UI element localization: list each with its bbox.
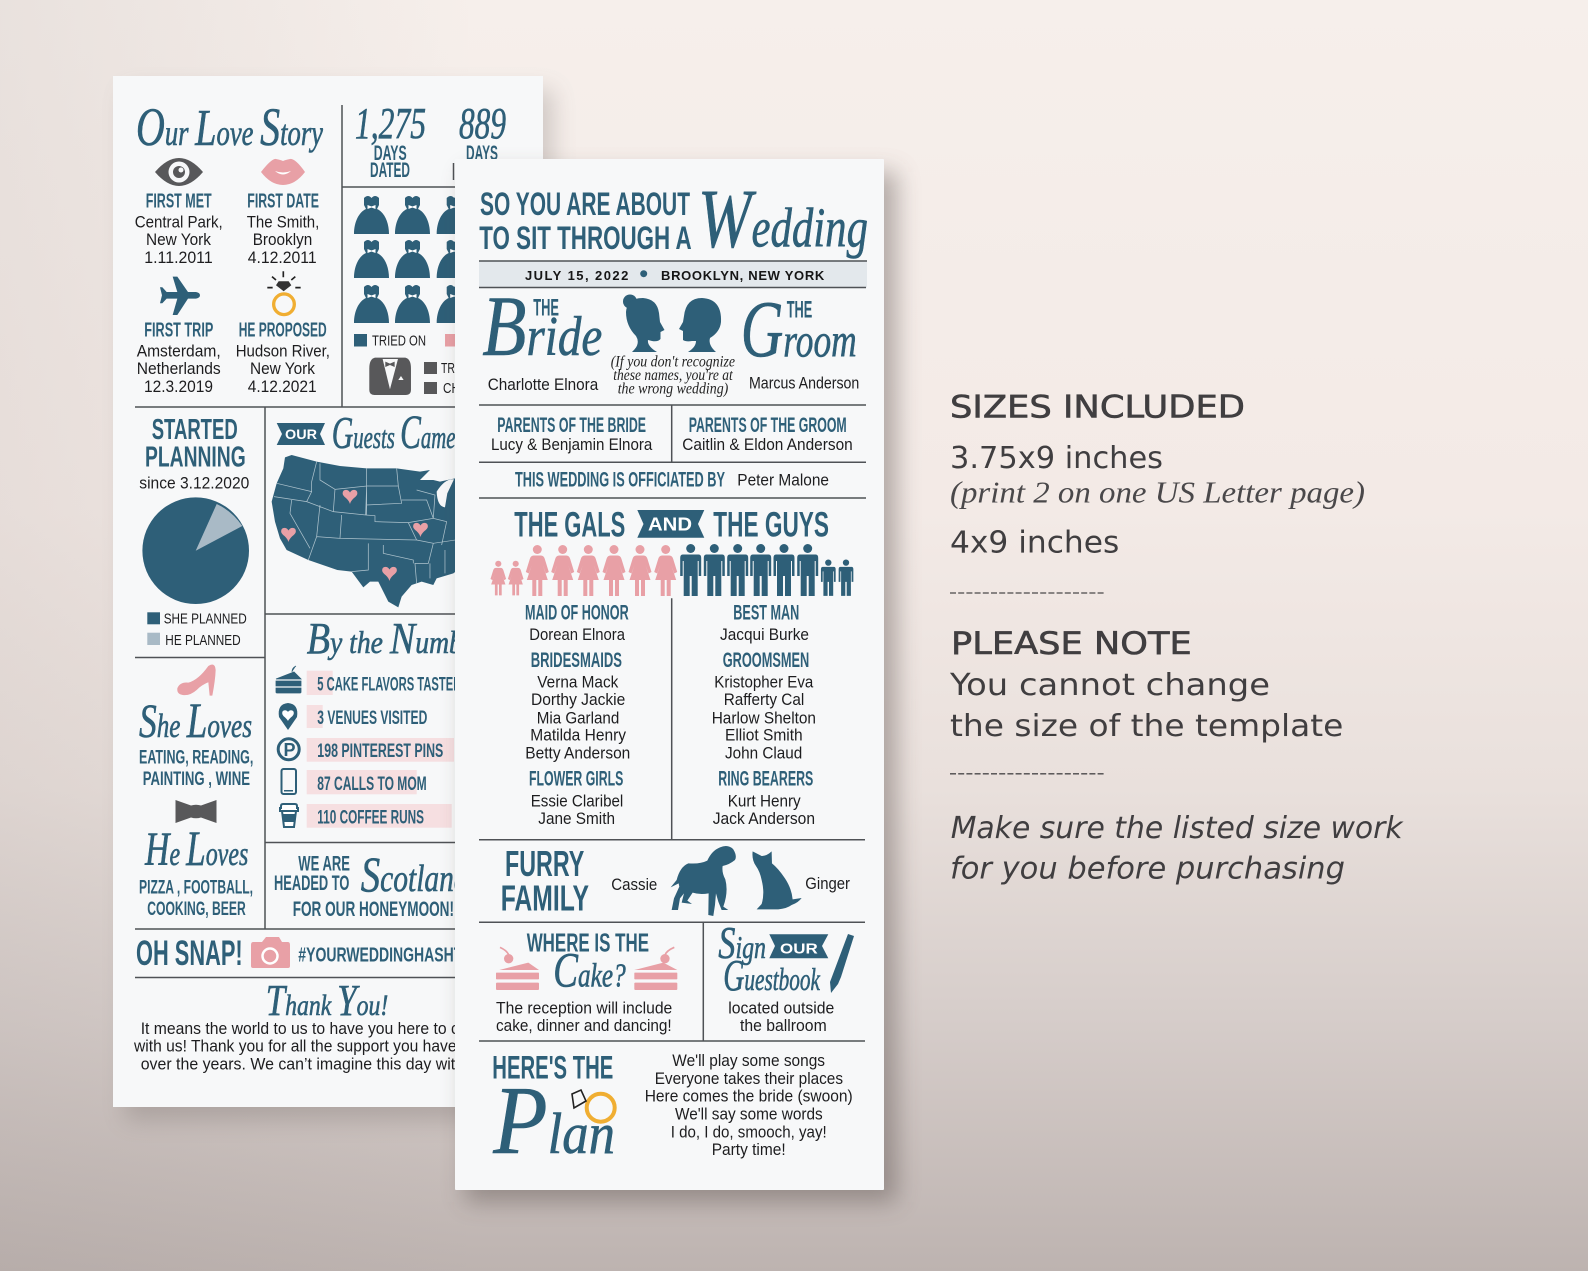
block: thank you: with us! Thank you for all the support you have given us — [133, 1038, 519, 1056]
list: the gals: Betty Anderson — [525, 743, 630, 762]
list: the guys — [712, 601, 816, 828]
title: so you are about to sit through a wedding — [479, 173, 868, 266]
date and location band: BROOKLYN, NEW YORK — [661, 268, 825, 283]
block: oh snap hashtag: #YOURWEDDINGHASHTAG — [298, 945, 482, 967]
block: she loves: She Loves — [139, 692, 252, 748]
block: oh snap hashtag — [136, 934, 482, 973]
heading: the gals and the guys: THE GUYS — [713, 506, 829, 545]
block: he proposed: Hudson River, — [236, 342, 330, 361]
block: started planning — [139, 414, 249, 493]
block: furry family — [501, 843, 850, 919]
list: the guys: Elliot Smith — [725, 726, 803, 745]
block: where is the cake: The reception will include — [496, 998, 672, 1017]
panel: size notes — [949, 389, 1404, 887]
text: ceremony plan: Here comes the bride (swoon) — [645, 1087, 853, 1106]
heading: the gals and the guys — [514, 506, 829, 545]
block: furry family: FAMILY — [501, 878, 589, 919]
legend: dresses — [354, 333, 458, 350]
block: furry family: Ginger — [805, 874, 850, 893]
icon: cat — [752, 851, 802, 909]
text: template size note — [949, 668, 1343, 744]
text: purchase note — [950, 811, 1404, 887]
list: the gals: Matilda Henry — [530, 726, 626, 745]
block: thank you — [133, 976, 521, 1073]
stat: days dated — [355, 99, 426, 182]
block: he proposed: HE PROPOSED — [239, 320, 327, 342]
block: sign our guestbook: Sign — [718, 917, 766, 968]
panel: front program card — [455, 159, 897, 1202]
text: print note: (print 2 on one US Letter page) — [950, 474, 1365, 510]
legend: tuxedos: TRIED ON — [441, 360, 491, 377]
note: wrong wedding: these names, you're at — [613, 367, 733, 384]
block: she loves — [139, 692, 253, 790]
block: thank you: It means the world to us to have you here to celebrate — [141, 1020, 516, 1038]
list: the gals: Dorthy Jackie — [531, 690, 625, 709]
heading: sizes included: SIZES INCLUDED — [950, 389, 1245, 425]
block: first met: Central Park, — [135, 213, 223, 232]
block: sign our guestbook: OUR — [780, 940, 818, 957]
block: honeymoon: Scotland — [361, 846, 469, 902]
list: the guys: Kurt Henry — [728, 791, 801, 810]
stat: days engaged: 889 — [459, 99, 506, 148]
block: first trip: 12.3.2019 — [144, 377, 213, 396]
block: honeymoon: WE ARE — [298, 853, 350, 876]
icon: plane — [160, 277, 200, 315]
block: first met: FIRST MET — [146, 191, 212, 213]
row: coffee: 110 COFFEE RUNS — [317, 807, 424, 828]
block: where is the cake: Cake? — [553, 942, 626, 998]
banner: our guests came: OUR — [285, 426, 317, 442]
block: he proposed — [236, 320, 330, 396]
row: calls — [282, 769, 427, 795]
row: venues: 3 VENUES VISITED — [317, 708, 427, 729]
block: he loves: He Loves — [144, 820, 248, 876]
text: ceremony plan: We'll say some words — [675, 1104, 823, 1123]
list: the gals: Mia Garland — [537, 708, 619, 727]
legend: planning pie: SHE PLANNED — [164, 611, 247, 627]
block: honeymoon — [274, 846, 469, 921]
list: the guys: BEST MAN — [733, 601, 799, 624]
list: the gals: Dorean Elnora — [529, 625, 625, 644]
block: first trip: FIRST TRIP — [144, 320, 213, 342]
stat: days dated: DATED — [370, 159, 410, 182]
text: template size note: You cannot change — [949, 668, 1270, 703]
icon: bow tie — [176, 800, 216, 823]
block: started planning: PLANNING — [145, 442, 246, 474]
heading: by the numbers: By the Numbers — [307, 614, 497, 663]
block: started planning: STARTED — [152, 414, 238, 446]
list: the guys: Harlow Shelton — [712, 708, 816, 727]
block: first trip: Amsterdam, — [137, 342, 221, 361]
text: ceremony plan: I do, I do, smooch, yay! — [671, 1122, 827, 1141]
block: the bride: THE — [533, 295, 559, 322]
list: the gals: Verna Mack — [537, 672, 619, 691]
text: purchase note: Make sure the listed size work — [951, 811, 1404, 846]
row: pinterest: 198 PINTEREST PINS — [317, 741, 443, 762]
chart: wedding party pictogram — [490, 544, 853, 596]
legend: tuxedos — [424, 360, 493, 397]
date and location band — [479, 261, 867, 288]
note: wrong wedding — [611, 354, 735, 397]
heading: the gals and the guys: THE GALS — [514, 506, 625, 545]
block: where is the cake: cake, dinner and dancing! — [496, 1016, 672, 1035]
text: ceremony plan: Party time! — [712, 1140, 786, 1159]
heading: the gals and the guys: AND — [648, 515, 692, 535]
block: thank you: Thank You! — [266, 976, 388, 1025]
row: pinterest: P — [284, 740, 296, 760]
icon: diamond ring — [267, 271, 301, 315]
heading: our love story: Our Love Story — [136, 97, 323, 157]
block: sign our guestbook: located outside — [728, 998, 834, 1017]
block: thank you: over the years. We can’t imagine this day without you. — [141, 1055, 521, 1073]
list: the guys: John Claud — [725, 743, 802, 762]
list: the gals — [525, 601, 630, 828]
icon: dog — [671, 846, 736, 916]
title: so you are about to sit through a wedding: SO YOU ARE ABOUT — [480, 186, 690, 222]
block: first date: The Smith, — [247, 213, 319, 232]
block: the groom: Marcus Anderson — [749, 373, 859, 392]
row: cake flavors — [276, 666, 461, 696]
block: first date: FIRST DATE — [247, 191, 319, 213]
block: parents of the groom: Caitlin & Eldon Anderson — [682, 435, 853, 454]
block: parents of the bride — [491, 414, 653, 454]
block: the bride: Charlotte Elnora — [488, 375, 599, 394]
text: ceremony plan — [645, 1051, 853, 1159]
block: here's the plan: HERE'S THE — [492, 1049, 613, 1085]
block: sign our guestbook: the ballroom — [740, 1016, 827, 1035]
date and location band: JULY 15, 2022 — [525, 268, 628, 283]
block: oh snap hashtag: OH SNAP! — [136, 934, 243, 973]
block: first met: 1.11.2011 — [144, 248, 213, 267]
block: first trip — [137, 320, 221, 396]
row: pinterest — [278, 738, 454, 762]
text: purchase note: for you before purchasing — [950, 852, 1345, 887]
text: 4x9 size: 4x9 inches — [950, 526, 1119, 560]
block: he loves — [139, 820, 253, 920]
legend: planning pie — [147, 611, 247, 649]
title: so you are about to sit through a wedding: TO SIT THROUGH A — [479, 220, 692, 256]
stat: days dated: DAYS — [374, 142, 407, 165]
note: wrong wedding: the wrong wedding) — [618, 380, 728, 397]
block: she loves: PAINTING , WINE — [143, 769, 250, 790]
icon: map hearts — [281, 490, 428, 581]
icon: high heel — [177, 664, 216, 696]
panel: back program card — [113, 76, 553, 1120]
list: the gals: Essie Claribel — [531, 791, 623, 810]
block: officiant: THIS WEDDING IS OFFICIATED BY — [515, 469, 725, 492]
list: the guys: Kristopher Eva — [714, 672, 814, 691]
icon: tuxedo — [369, 358, 411, 395]
block: the groom: Groom — [741, 287, 857, 375]
legend: planning pie: HE PLANNED — [165, 633, 241, 649]
row: calls: 87 CALLS TO MOM — [317, 774, 427, 795]
block: the bride: Bride — [482, 278, 602, 374]
legend: tuxedos: CHOSEN — [443, 380, 493, 397]
row: venues — [279, 703, 427, 730]
text: 3.75x9 size: 3.75x9 inches — [950, 441, 1163, 476]
text: ceremony plan: We'll play some songs — [672, 1051, 825, 1070]
banner: our guests came: Guests Came From — [332, 406, 512, 459]
block: he proposed: 4.12.2021 — [248, 377, 317, 396]
block: first trip: Netherlands — [137, 359, 221, 378]
block: parents of the groom: PARENTS OF THE GROOM — [689, 414, 847, 437]
block: he loves: COOKING, BEER — [147, 899, 246, 920]
list: the gals: MAID OF HONOR — [525, 601, 629, 624]
title: so you are about to sit through a wedding: Wedding — [698, 173, 868, 266]
block: parents of the bride: Lucy & Benjamin Elnora — [491, 435, 653, 454]
row: coffee — [280, 804, 452, 828]
stat: days engaged — [459, 99, 506, 165]
legend: dresses: TRIED ON — [372, 333, 426, 350]
block: furry family: Cassie — [611, 875, 657, 894]
list: the guys: Jacqui Burke — [720, 625, 809, 644]
stat: days engaged: DAYS — [466, 142, 498, 165]
block: furry family: FURRY — [505, 843, 584, 884]
map: united states — [272, 455, 467, 607]
heading: please note: PLEASE NOTE — [951, 626, 1192, 662]
row: cake flavors: 5 CAKE FLAVORS TASTED — [317, 675, 461, 696]
block: first date: Brooklyn — [253, 230, 312, 249]
list: the guys: RING BEARERS — [718, 768, 813, 791]
block: sign our guestbook — [718, 917, 854, 1035]
block: first met: New York — [146, 230, 211, 249]
block: first date: 4.12.2011 — [248, 248, 317, 267]
icon: lips — [261, 159, 305, 185]
block: here's the plan: Plan — [492, 1067, 615, 1175]
block: officiant: Peter Malone — [737, 470, 829, 490]
block: started planning: since 3.12.2020 — [139, 474, 249, 493]
icon: bride and groom silhouettes — [623, 294, 721, 352]
list: the guys: Rafferty Cal — [724, 690, 804, 709]
list: the guys: Jack Anderson — [713, 809, 815, 828]
block: where is the cake — [496, 928, 677, 1035]
list: the gals: FLOWER GIRLS — [529, 768, 623, 791]
block: first met — [135, 191, 223, 267]
block: where is the cake: WHERE IS THE — [527, 928, 649, 958]
block: first date — [247, 191, 319, 267]
block: parents of the bride: PARENTS OF THE BRIDE — [497, 414, 646, 437]
block: he proposed: New York — [250, 359, 315, 378]
block: she loves: EATING, READING, — [139, 747, 253, 768]
stat: days dated: 1,275 — [355, 99, 426, 148]
list: the gals: BRIDESMAIDS — [531, 649, 622, 672]
list: the gals: Jane Smith — [538, 809, 615, 828]
block: honeymoon: HEADED TO — [274, 872, 349, 895]
block: sign our guestbook: Guestbook — [723, 951, 821, 1000]
chart: dresses pictogram — [354, 196, 472, 323]
block: parents of the groom — [682, 414, 853, 454]
note: wrong wedding: (If you don't recognize — [611, 354, 735, 371]
text: ceremony plan: Everyone takes their places — [655, 1069, 843, 1088]
block: the groom: THE — [787, 296, 812, 323]
block: he loves: PIZZA , FOOTBALL, — [139, 877, 253, 898]
icon: eye — [155, 158, 203, 186]
chart: planning pie — [142, 497, 249, 604]
block: honeymoon: FOR OUR HONEYMOON! — [293, 898, 454, 921]
text: template size note: the size of the template — [950, 709, 1343, 744]
list: the guys: GROOMSMEN — [723, 649, 809, 672]
